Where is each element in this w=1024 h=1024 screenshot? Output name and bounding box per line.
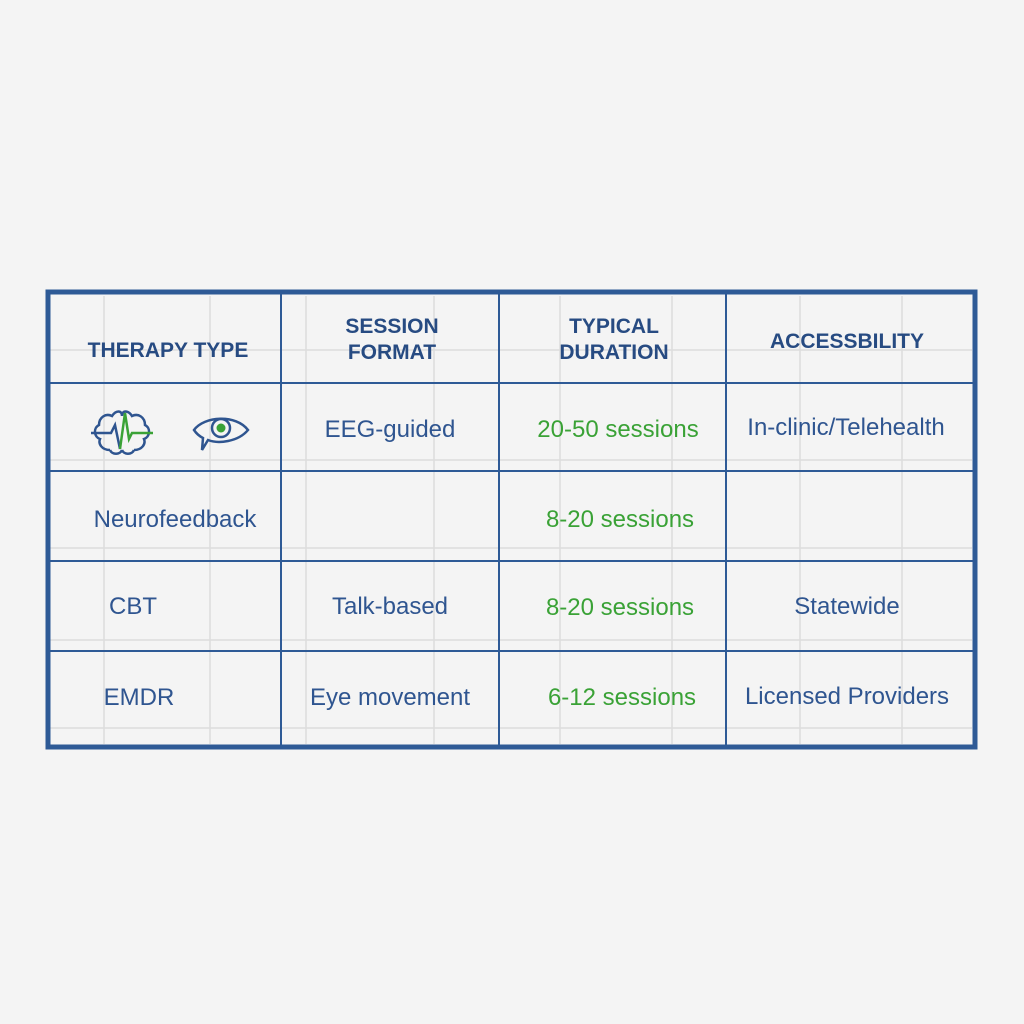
header: session format — [345, 315, 439, 364]
table: Eye movement — [310, 684, 470, 711]
header: typical duration: DURATION — [559, 341, 669, 364]
header: session format: SESSION — [345, 315, 439, 338]
table: 6-12 sessions — [548, 684, 696, 711]
table: Licensed Providers — [745, 683, 949, 710]
table: In-clinic/Telehealth — [747, 414, 945, 441]
header: typical duration: TYPICAL — [569, 315, 659, 338]
table: Statewide — [794, 593, 900, 620]
header: accessibility: ACCESSBILITY — [770, 330, 924, 353]
header: therapy type: THERAPY TYPE — [88, 339, 248, 362]
table: 20-50 sessions — [537, 416, 699, 443]
header: session format: FORMAT — [348, 341, 436, 364]
row 1 text: EEG-guided — [325, 416, 455, 443]
table: Talk-based — [332, 593, 448, 620]
table: 8-20 sessions — [546, 506, 694, 533]
table: 8-20 sessions — [546, 594, 694, 621]
header: typical duration — [559, 315, 669, 364]
icon: brain with pulse — [91, 410, 153, 455]
row 2 text: Neurofeedback — [94, 506, 256, 533]
row 3 text: CBT — [109, 593, 157, 620]
row 4 text: EMDR — [104, 684, 174, 711]
icon: eye speech bubble — [192, 418, 250, 451]
